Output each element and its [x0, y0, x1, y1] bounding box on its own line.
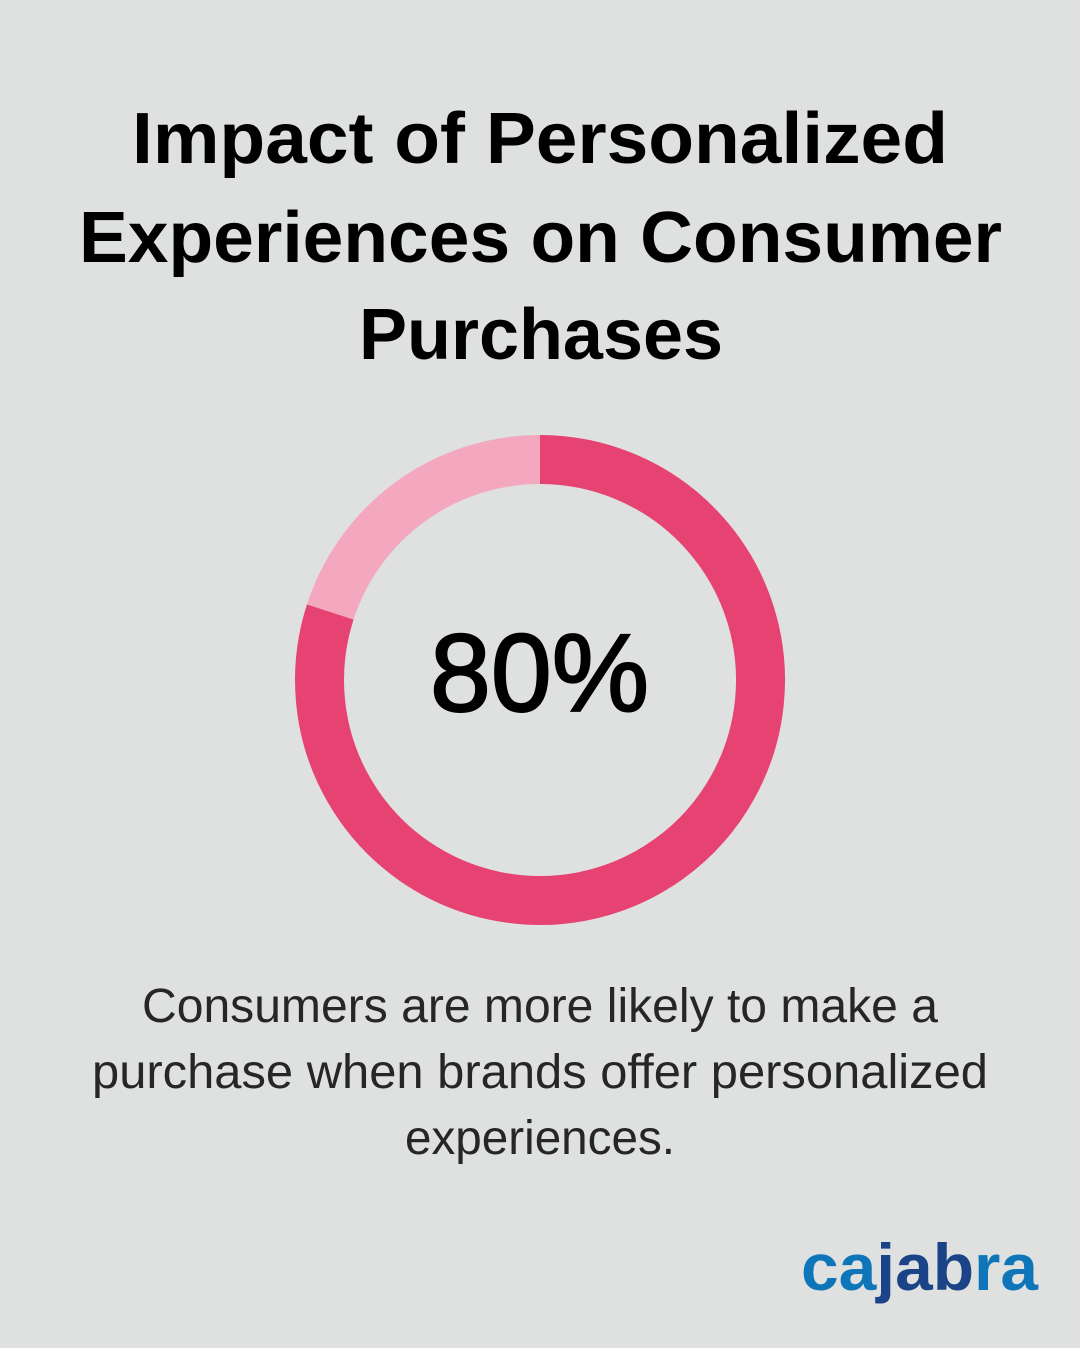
title: Purchases	[359, 295, 723, 375]
logo: cajabra: cajabra	[801, 1230, 1039, 1304]
description text: purchase when brands offer personalized	[92, 1046, 988, 1099]
donut segment: remaining 20%	[330, 460, 540, 612]
description text	[92, 980, 988, 1165]
title: Experiences on Consumer	[79, 198, 1002, 278]
description text: Consumers are more likely to make a	[142, 980, 938, 1033]
title: Impact of Personalized	[132, 99, 948, 179]
donut value: 80%	[430, 612, 649, 735]
donut chart: 80%	[320, 460, 761, 901]
description text: experiences.	[405, 1112, 675, 1165]
title	[79, 99, 1002, 375]
donut segment: 80% share	[320, 460, 761, 901]
